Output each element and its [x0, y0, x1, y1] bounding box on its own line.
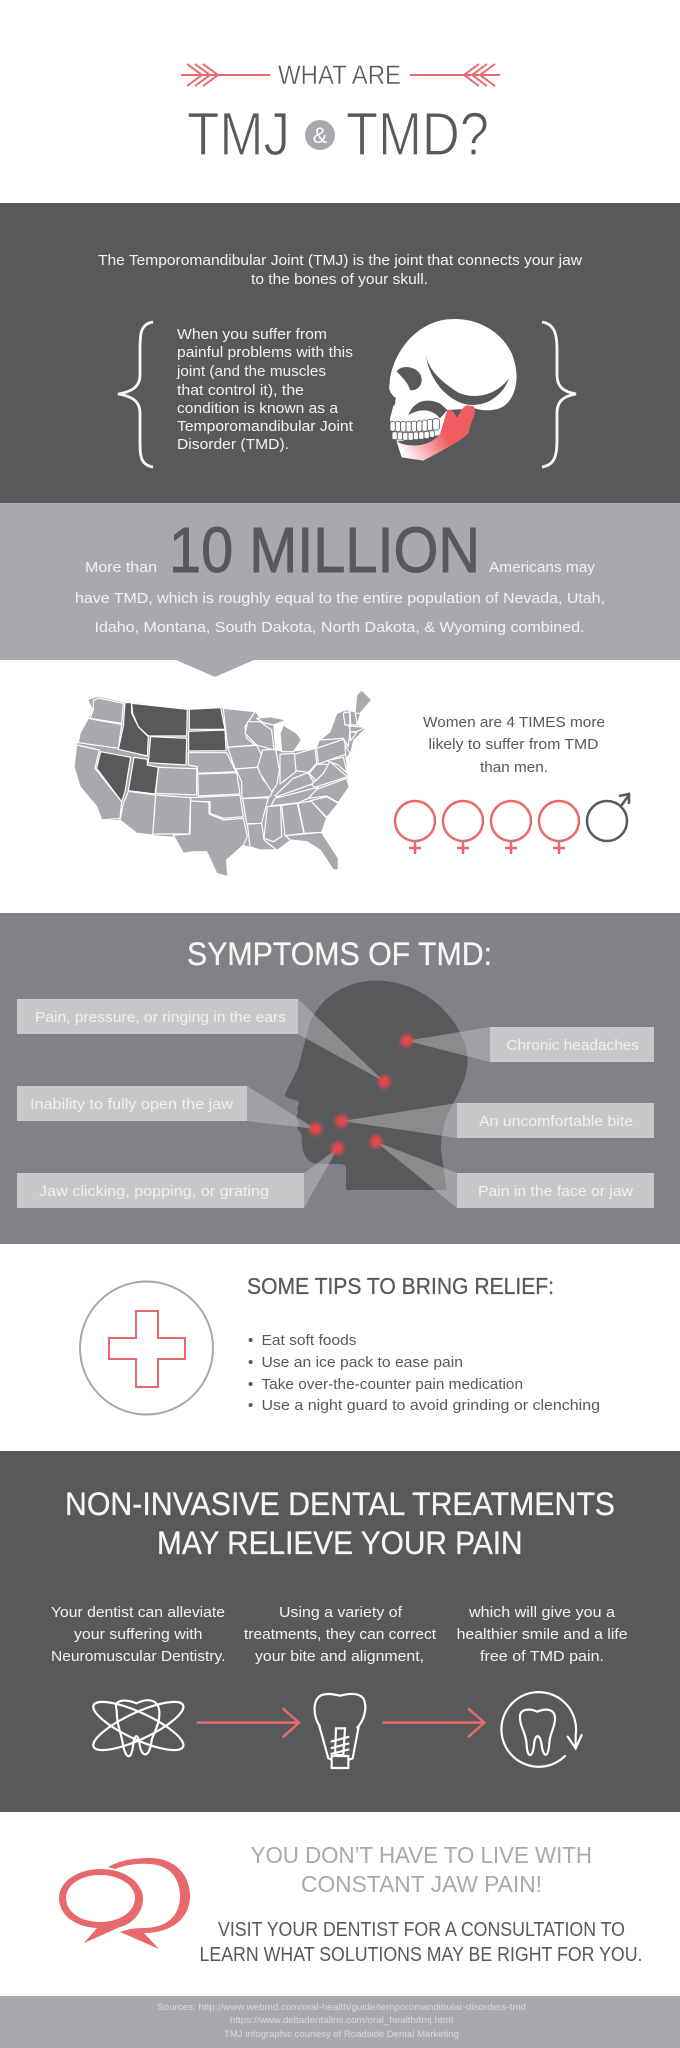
- callout beams: [247, 999, 490, 1208]
- TMD definition text: [176, 327, 353, 453]
- heading: treatments: [65, 1486, 615, 1561]
- footer: sources: Sources: http://www.webmd.com/oral-health/guide/temporomandibular-disorders-tmd: [157, 2002, 526, 2013]
- tips list: Use a night guard to avoid grinding or clenching: [262, 1398, 600, 1414]
- TMD definition text: Disorder (TMD).: [177, 437, 289, 453]
- ampersand badge: [305, 120, 335, 150]
- symptom label: headaches: Chronic headaches: [506, 1038, 639, 1054]
- icon: male symbol: [587, 794, 629, 841]
- symptom label: open jaw: Inability to fully open the jaw: [30, 1097, 234, 1113]
- tips list: Use an ice pack to ease pain: [262, 1355, 463, 1371]
- population comparison text: have TMD, which is roughly equal to the entire population of Nevada, Utah,: [75, 591, 605, 607]
- intro text: to the bones of your skull.: [251, 272, 428, 288]
- column text: neuromuscular dentistry: your suffering with: [74, 1627, 202, 1643]
- tips list: Eat soft foods: [262, 1333, 356, 1349]
- text: visit your dentist: VISIT YOUR DENTIST FOR A CONSULTATION TO: [218, 1919, 625, 1941]
- icon: medical cross in circle: [80, 1282, 213, 1414]
- big number: 10 MILLION: [169, 514, 480, 586]
- heading: tips: SOME TIPS TO BRING RELIEF:: [247, 1273, 554, 1299]
- section: header: [0, 0, 680, 203]
- footer: sources: TMJ infographic courtesy of Roadside Dental Marketing: [224, 2029, 459, 2040]
- heading: constant jaw pain: [251, 1842, 592, 1897]
- column text: bite and alignment: your bite and alignment,: [255, 1649, 424, 1665]
- column text: healthier smile: healthier smile and a life: [457, 1627, 628, 1643]
- symptom label: face pain: [457, 1173, 654, 1208]
- text: more than: More than: [85, 560, 157, 576]
- TMD definition text: Temporomandibular Joint: [177, 419, 353, 435]
- left brace: [118, 322, 153, 467]
- icon: skull with red jaw: [389, 319, 517, 461]
- head silhouette: [285, 981, 468, 1190]
- left arrow ornament: [181, 64, 270, 86]
- column text: healthier smile: which will give you a: [468, 1605, 616, 1621]
- symptom label: ears: [17, 999, 298, 1034]
- panel: symptoms of TMD: [0, 913, 680, 1244]
- tips list: [249, 1333, 600, 1414]
- ampersand badge: &: [313, 123, 328, 148]
- heading: TMJ: TMJ: [187, 100, 290, 168]
- population comparison text: [75, 591, 605, 636]
- column text: bite and alignment: treatments, they can correct: [244, 1627, 436, 1643]
- icon: tooth in rotation circle: [501, 1692, 582, 1767]
- symptom label: open jaw: [17, 1086, 247, 1121]
- footer: sources: https://www.deltadentalins.com/oral_health/tmj.html: [230, 2015, 453, 2026]
- text: women four times more likely: [423, 715, 605, 776]
- heading: treatments: MAY RELIEVE YOUR PAIN: [157, 1525, 522, 1561]
- arrow: first step: [197, 1708, 299, 1737]
- TMD definition text: joint (and the muscles: [176, 364, 326, 380]
- footer: sources: [0, 1996, 680, 2048]
- TMD definition text: condition is known as a: [177, 401, 339, 417]
- icon: dental implant: [315, 1694, 365, 1768]
- symptom label: ears: Pain, pressure, or ringing in the ears: [35, 1010, 286, 1026]
- column text: neuromuscular dentistry: [51, 1605, 226, 1665]
- TMD definition text: When you suffer from: [177, 327, 327, 343]
- panel: 10 million statistic: [0, 503, 680, 677]
- heading: what are: WHAT ARE: [278, 60, 401, 90]
- map: United States with highlighted states: [74, 690, 372, 877]
- panel: TMJ definition: [0, 203, 680, 503]
- symptom label: headaches: [490, 1027, 654, 1062]
- column text: healthier smile: free of TMD pain.: [480, 1649, 604, 1665]
- column text: healthier smile: [457, 1605, 628, 1665]
- arrow: second step: [382, 1708, 484, 1737]
- population comparison text: Idaho, Montana, South Dakota, North Dakota, & Wyoming combined.: [94, 620, 584, 636]
- pain points: [307, 1032, 416, 1157]
- panel: relief tips: [0, 1244, 680, 1451]
- panel: call to action: [0, 1812, 680, 1996]
- column text: neuromuscular dentistry: Neuromuscular Dentistry.: [51, 1649, 226, 1665]
- text: americans may: Americans may: [489, 560, 596, 576]
- heading: treatments: NON-INVASIVE DENTAL TREATMENTS: [65, 1486, 615, 1522]
- symptom label: bite: An uncomfortable bite: [479, 1114, 633, 1130]
- column text: bite and alignment: Using a variety of: [279, 1605, 403, 1621]
- icon: tooth with orbits: [88, 1693, 189, 1759]
- heading: TMD: TMD?: [346, 100, 489, 168]
- text: women four times more likely: than men.: [480, 760, 548, 776]
- symptom label: face pain: Pain in the face or jaw: [478, 1184, 634, 1200]
- TMD definition text: painful problems with this: [177, 345, 353, 361]
- panel: dental treatments: [0, 1451, 680, 1812]
- symptom label: clicking: Jaw clicking, popping, or grating: [39, 1184, 269, 1200]
- icons: four female symbols: [395, 801, 579, 854]
- symptom label: clicking: [17, 1173, 304, 1208]
- heading: symptoms: SYMPTOMS OF TMD:: [187, 936, 492, 972]
- column text: bite and alignment: [244, 1605, 436, 1665]
- heading: constant jaw pain: CONSTANT JAW PAIN!: [301, 1871, 542, 1897]
- intro text: [98, 253, 583, 288]
- symptom label: bite: [457, 1103, 654, 1138]
- right arrow ornament: [410, 64, 500, 86]
- heading: constant jaw pain: YOU DON’T HAVE TO LIVE WITH: [251, 1842, 592, 1868]
- column text: neuromuscular dentistry: Your dentist can alleviate: [51, 1605, 225, 1621]
- tips list: Take over-the-counter pain medication: [262, 1377, 523, 1393]
- icon: speech bubbles: [59, 1858, 190, 1949]
- right brace: [542, 322, 576, 467]
- TMD definition text: that control it), the: [177, 383, 304, 399]
- text: women four times more likely: likely to suffer from TMD: [428, 737, 598, 753]
- text: visit your dentist: [200, 1919, 642, 1966]
- text: women four times more likely: Women are 4 TIMES more: [423, 715, 605, 731]
- intro text: The Temporomandibular Joint (TMJ) is the joint that connects your jaw: [98, 253, 583, 269]
